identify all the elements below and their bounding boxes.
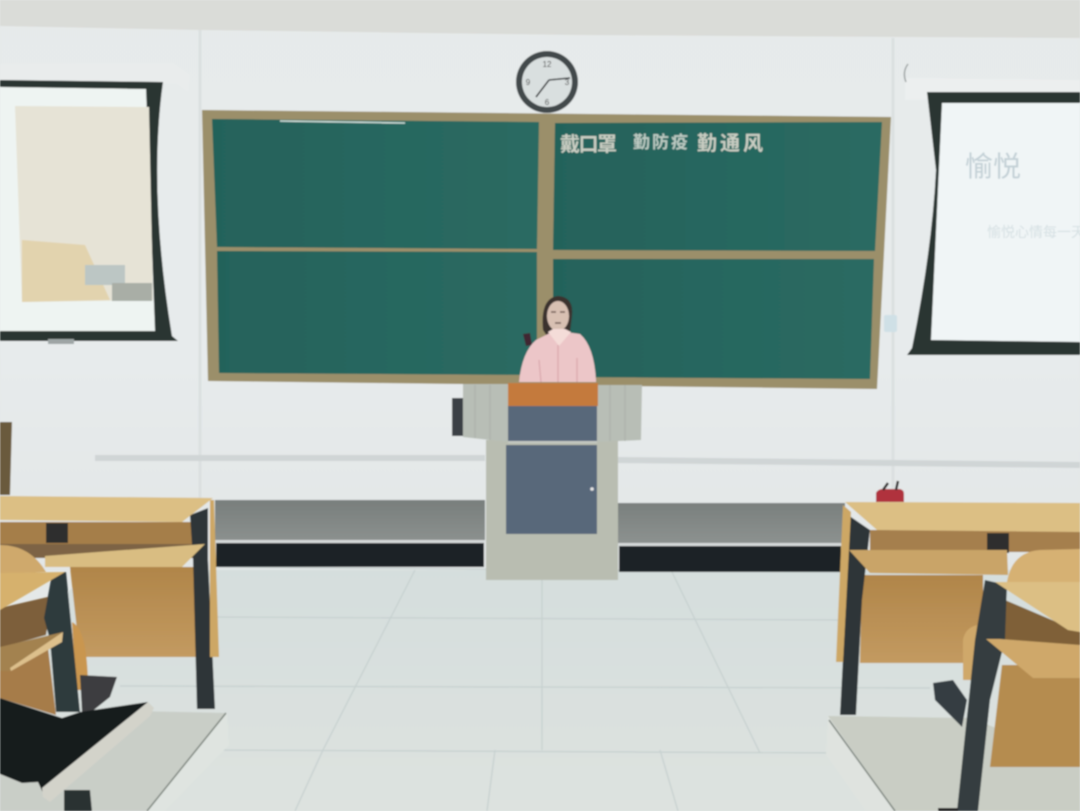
seated student's leg and shoe [0, 698, 154, 802]
wall clock: 3 [565, 78, 570, 87]
blackboard handwriting: 勤通风 [697, 132, 763, 155]
slide title: 愉悦 [965, 151, 1021, 182]
wall pipe [95, 458, 1080, 465]
back wall [0, 0, 1080, 570]
floor [0, 567, 1080, 811]
right step [826, 716, 1080, 811]
wall clock: 12 [543, 60, 552, 69]
right foreground chair and desk [933, 549, 1080, 811]
stage risers [215, 500, 845, 572]
wall clock [516, 51, 578, 113]
blackboard handwriting: 戴口罩 [560, 133, 617, 156]
wall clock: 6 [545, 98, 550, 107]
wall clock: 9 [526, 78, 531, 87]
fire extinguishers [876, 481, 904, 502]
blackboard handwriting [560, 132, 763, 156]
blackboard [202, 110, 891, 389]
wall seams [200, 30, 893, 500]
far-left chair back [0, 422, 12, 495]
right desk [836, 502, 1080, 715]
left desk [0, 496, 219, 709]
right projection screen [904, 64, 1080, 355]
speaker: woman in pink jacket [519, 296, 596, 382]
blackboard handwriting: 勤防疫 [633, 132, 688, 152]
left projection screen [0, 63, 190, 344]
wall switch [884, 315, 897, 332]
lectern [452, 383, 642, 580]
left foreground chair and desk [0, 545, 117, 811]
ceiling [0, 0, 1080, 38]
left step [0, 710, 229, 811]
